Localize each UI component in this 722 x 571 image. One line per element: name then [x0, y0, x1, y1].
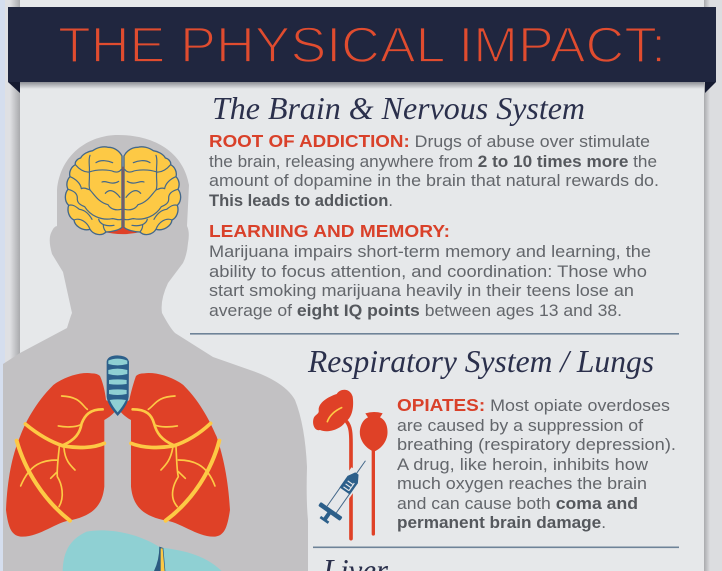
- text block: opiates: A drug, like heroin, inhibits how: [397, 456, 648, 474]
- text block: root of addiction: amount of dopamine in the brain that natural rewards do.: [209, 172, 659, 190]
- icon: poppy and syringe: [313, 390, 388, 539]
- right hemisphere: [124, 147, 181, 235]
- text block: opiates: breathing (respiratory depression).: [397, 436, 676, 454]
- poppy seed head: [360, 412, 388, 534]
- heading: respiratory: Respiratory System / Lungs: [307, 343, 654, 379]
- text block: opiates: [397, 395, 676, 532]
- right lung: [118, 373, 230, 537]
- text block: root of addiction: the brain, releasing anywhere from 2 to 10 times more the: [209, 153, 657, 171]
- text block: learning and memory: LEARNING AND MEMORY:: [209, 221, 450, 241]
- trachea: [107, 355, 129, 416]
- text block: learning and memory: [209, 221, 651, 320]
- liver: [63, 530, 222, 571]
- text block: opiates: permanent brain damage .: [397, 514, 606, 532]
- text block: opiates: are caused by a suppression of: [397, 417, 643, 435]
- text block: opiates: and can cause both coma and: [397, 495, 638, 513]
- divider: [190, 333, 679, 335]
- divider: [313, 546, 679, 548]
- text block: learning and memory: start smoking marijuana heavily in their teens lose an: [209, 282, 634, 300]
- body silhouette: [3, 135, 308, 571]
- banner: title ribbon: [8, 7, 716, 93]
- left lung: [6, 373, 117, 537]
- text block: learning and memory: Marijuana impairs short-term memory and learning, the: [209, 243, 651, 261]
- text block: learning and memory: ability to focus attention, and coordination: Those who: [209, 263, 647, 281]
- icon: lungs and liver: [6, 355, 230, 571]
- text block: opiates: much oxygen reaches the brain: [397, 475, 647, 493]
- right airways: [131, 396, 219, 521]
- syringe: [313, 453, 377, 529]
- poppy flower: [313, 390, 353, 539]
- text block: root of addiction: This leads to addiction.: [209, 192, 393, 210]
- left airways: [17, 396, 104, 521]
- icon: brain: [65, 147, 181, 235]
- left hemisphere: [65, 147, 122, 235]
- text block: learning and memory: average of eight IQ points between ages 13 and 38.: [209, 302, 622, 320]
- brain stem: [103, 167, 142, 234]
- gallbladder: [154, 547, 165, 571]
- text block: opiates: OPIATES: Most opiate overdoses: [397, 395, 670, 415]
- heading: brain: The Brain & Nervous System: [212, 90, 585, 126]
- text block: root of addiction: ROOT OF ADDICTION: Drugs of abuse over stimulate: [209, 131, 650, 151]
- text block: root of addiction: [209, 131, 659, 210]
- title: THE PHYSICAL IMPACT:: [58, 17, 666, 73]
